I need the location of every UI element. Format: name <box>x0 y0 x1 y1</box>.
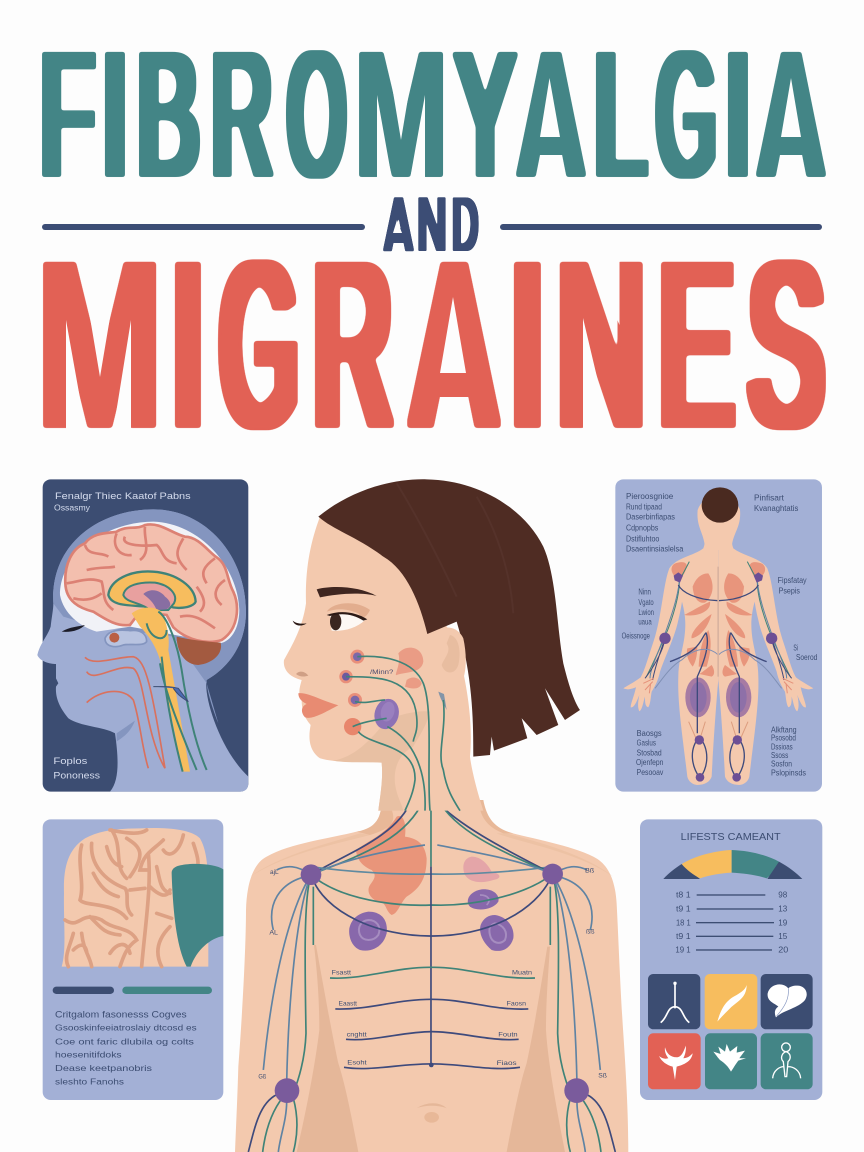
title: MIGRAINES: E <box>659 216 733 473</box>
title: FIBROMYALGIA: M <box>356 17 446 213</box>
title: FIBROMYALGIA: G <box>657 17 716 213</box>
panel labels: Ojenfepn <box>636 757 664 767</box>
panel: lifestyle gauge and icons <box>640 819 822 1100</box>
title: FIBROMYALGIA: L <box>594 17 646 213</box>
eye <box>293 612 367 631</box>
ear <box>431 628 466 703</box>
jaw shadow <box>333 711 430 811</box>
small joint labels: Bß <box>585 868 594 875</box>
panel labels: Alkftang <box>771 724 797 734</box>
text block: Dease keetpanobris <box>55 1063 153 1073</box>
brain surface illustration <box>62 828 208 967</box>
panel labels: Ninn <box>638 587 651 597</box>
rib labels: Foutn <box>498 1032 518 1039</box>
rib labels: Fsastt <box>332 970 351 977</box>
data rows: t8 1 <box>676 891 691 900</box>
text block: Coe ont faric dlubila og colts <box>55 1036 195 1046</box>
panel: brain texture with cognition text <box>43 819 223 1100</box>
rib labels: Fiaos <box>497 1060 517 1067</box>
title: AND with rules: D <box>452 183 478 267</box>
title: FIBROMYALGIA: R <box>212 17 272 213</box>
title: MIGRAINES <box>38 216 824 473</box>
facial nerves <box>85 657 165 768</box>
panel labels: Ssoss <box>771 750 788 760</box>
panel text: Pononess <box>53 771 101 781</box>
panel labels: Fipsfatay <box>778 575 807 585</box>
panel text: Fenalgr Thiec Kaatof Pabns <box>55 491 191 501</box>
panel labels: Pieroosgnioe <box>626 491 674 501</box>
panel labels: Baosgs <box>637 728 662 738</box>
small joint labels: ajL <box>270 869 279 876</box>
right arm nerves <box>550 867 615 1152</box>
facial nerves <box>346 656 460 811</box>
text block: sleshto Fanohs <box>55 1077 124 1086</box>
panel: back of body diagram <box>615 479 822 792</box>
title: FIBROMYALGIA: Y <box>456 17 514 213</box>
nerve network <box>311 800 553 1069</box>
icon: teal figure <box>761 1033 813 1089</box>
brainstem <box>132 607 190 772</box>
panel labels: Gaslus <box>637 738 656 748</box>
panel labels: Stosbad <box>637 748 662 758</box>
data rows: t9 1 <box>676 932 691 941</box>
title: AND with rules: N <box>418 183 446 267</box>
hair <box>318 479 580 757</box>
panel labels: Kvanaghtatis <box>754 503 798 513</box>
panel labels: Si <box>793 643 798 653</box>
panel labels: Psepis <box>779 585 800 595</box>
data rows: 13 <box>778 905 788 914</box>
navel <box>417 1103 447 1123</box>
title: FIBROMYALGIA: A <box>521 17 581 213</box>
icon: teal burst <box>705 1033 757 1089</box>
brain <box>65 524 237 642</box>
title: MIGRAINES: A <box>414 216 494 473</box>
title: FIBROMYALGIA: I <box>102 17 128 213</box>
purple gland <box>371 696 402 732</box>
title: FIBROMYALGIA: F <box>40 17 94 213</box>
title: MIGRAINES: R <box>314 216 392 473</box>
title: MIGRAINES: G <box>220 216 298 473</box>
panel labels: Dssioas <box>771 742 793 752</box>
rib labels: Eaastt <box>339 1001 357 1008</box>
icon: yellow stroke <box>705 974 757 1029</box>
purple lobes <box>349 889 514 951</box>
nose mark <box>296 672 308 677</box>
panel labels: Dsaentinsiaslelsa <box>626 544 684 554</box>
teal shape <box>172 864 223 967</box>
small joint labels: ßß <box>586 928 595 935</box>
small joint labels: Gß <box>258 1073 266 1080</box>
rib labels: Muatn <box>512 969 532 976</box>
title: MIGRAINES: M <box>38 216 161 473</box>
small joint labels: AL <box>269 929 278 936</box>
panel labels: Lwion <box>638 607 654 617</box>
data rows: 15 <box>778 932 788 941</box>
body figure <box>623 487 813 785</box>
panel labels <box>622 491 818 777</box>
panel labels: Psosobd <box>771 733 796 743</box>
small joint labels: Sß <box>598 1072 607 1079</box>
title: MIGRAINES: I <box>510 216 545 473</box>
text block: Gsooskinfeeiatroslaiy dtcosd es <box>55 1024 197 1033</box>
panel labels: Cdpnopbs <box>626 523 658 533</box>
data rows: 19 <box>778 918 788 927</box>
blush <box>396 648 423 689</box>
panel: brain cross-section <box>37 479 248 792</box>
data rows: 19 1 <box>675 946 691 955</box>
eyelid shadow <box>327 603 370 617</box>
central figure: head <box>284 479 580 811</box>
panel text: Foplos <box>53 756 88 766</box>
data rows: 20 <box>778 946 789 955</box>
title: FIBROMYALGIA <box>40 17 821 213</box>
title: AND with rules <box>42 183 822 267</box>
rib labels: Esoht <box>347 1060 367 1067</box>
title: FIBROMYALGIA: B <box>137 17 200 213</box>
text block: hoesenitifdoks <box>55 1050 122 1059</box>
rib labels: cnghtt <box>347 1032 367 1039</box>
panel labels: Sosfon <box>771 759 792 769</box>
rib labels: Faosn <box>507 1001 526 1008</box>
face and neck <box>284 517 483 811</box>
data rows: 18 1 <box>676 918 691 927</box>
panel text <box>53 491 191 781</box>
cerebellum <box>177 637 221 665</box>
title: FIBROMYALGIA: I <box>724 17 751 213</box>
data rows: t9 1 <box>676 905 691 914</box>
cheek label: /Minn? <box>370 669 394 676</box>
panel labels: uaua <box>638 617 652 627</box>
text block: Critgalom fasonesss Cogves <box>55 1009 187 1019</box>
panel labels: Pesooav <box>637 767 664 777</box>
sinus <box>105 630 147 647</box>
eyebrow <box>317 587 377 597</box>
title: AND with rules: A <box>386 183 412 267</box>
left arm nerves <box>248 867 313 1152</box>
title: MIGRAINES: N <box>557 216 645 473</box>
nerve nodes <box>275 864 589 1103</box>
pink patch <box>463 857 499 882</box>
rib labels <box>332 969 532 1067</box>
central figure: torso and arms <box>235 800 628 1152</box>
small joint labels <box>258 868 607 1080</box>
text block <box>55 1009 197 1086</box>
lips <box>298 693 338 718</box>
panel text: Ossasmy <box>54 504 90 513</box>
gauge <box>663 850 802 879</box>
icon: posture stand <box>648 974 700 1029</box>
panel labels: Pinfisart <box>754 493 785 503</box>
icon: coral pelvis <box>648 1033 701 1089</box>
panel labels: Soerod <box>796 652 818 662</box>
data rows <box>675 891 789 955</box>
pressure points <box>339 650 364 735</box>
panel labels: Rund tipaad <box>626 501 662 511</box>
icon: heart speech <box>761 974 813 1029</box>
panel labels: Daserbinfiapas <box>626 512 675 522</box>
panel labels: Dstifluhtoo <box>626 533 660 543</box>
panel heading: LIFESTS CAMEANT <box>681 832 781 843</box>
salmon patch <box>356 816 427 915</box>
title: FIBROMYALGIA: O <box>288 17 345 213</box>
panel labels: Pslopinsds <box>771 767 806 777</box>
title: MIGRAINES: I <box>172 216 204 473</box>
panel labels: Oeissnoge <box>622 631 650 641</box>
panel labels: Vgato <box>638 597 654 607</box>
data rows: 98 <box>778 891 788 900</box>
